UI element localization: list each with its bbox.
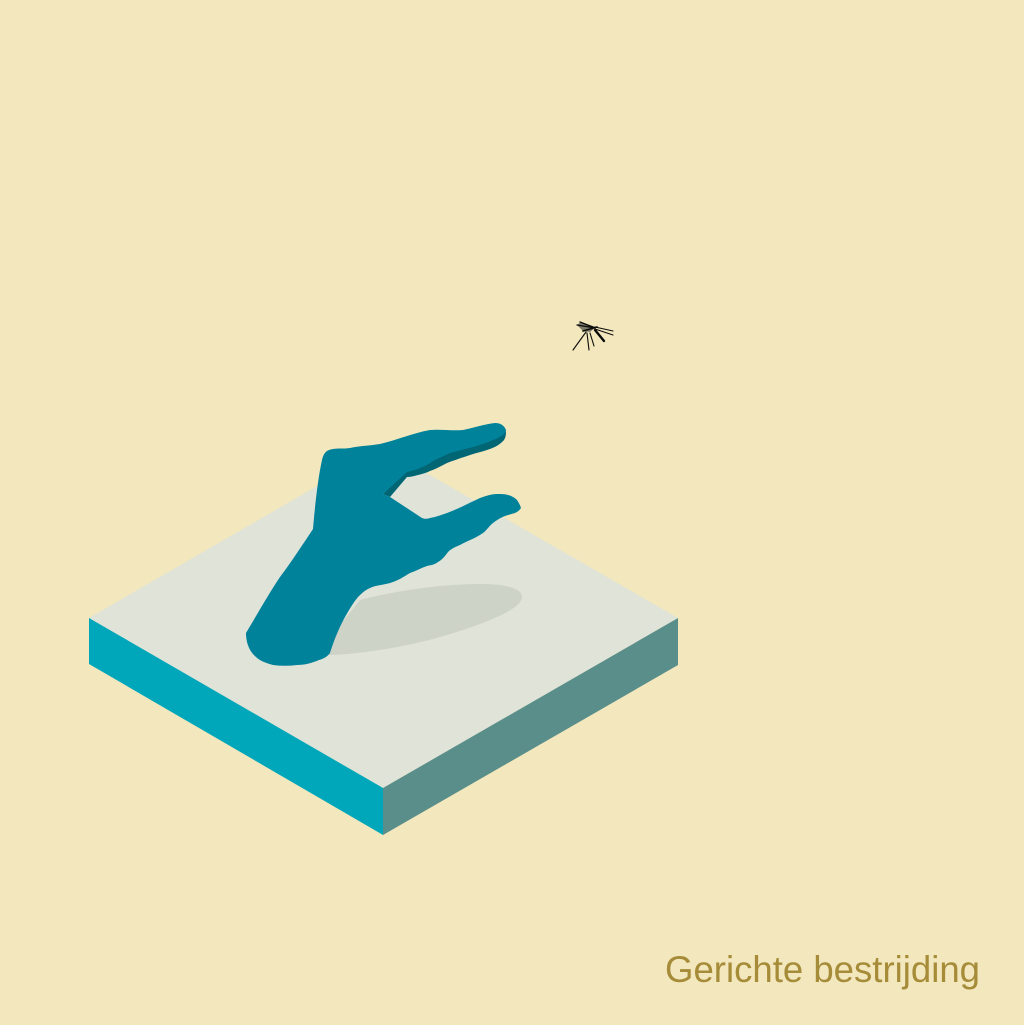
isometric platform <box>89 448 678 835</box>
platform top face <box>89 448 678 788</box>
hand silhouette <box>246 423 521 666</box>
mosquito wings and body <box>577 322 596 332</box>
platform right face <box>383 618 678 835</box>
icon: mosquito <box>573 322 613 350</box>
platform left face <box>89 618 383 835</box>
hand reaching for the mosquito <box>246 423 521 666</box>
finger underside shading <box>383 429 506 497</box>
mosquito legs <box>573 332 586 350</box>
caption: Gerichte bestrijding <box>665 949 980 990</box>
hand shadow <box>328 584 522 655</box>
